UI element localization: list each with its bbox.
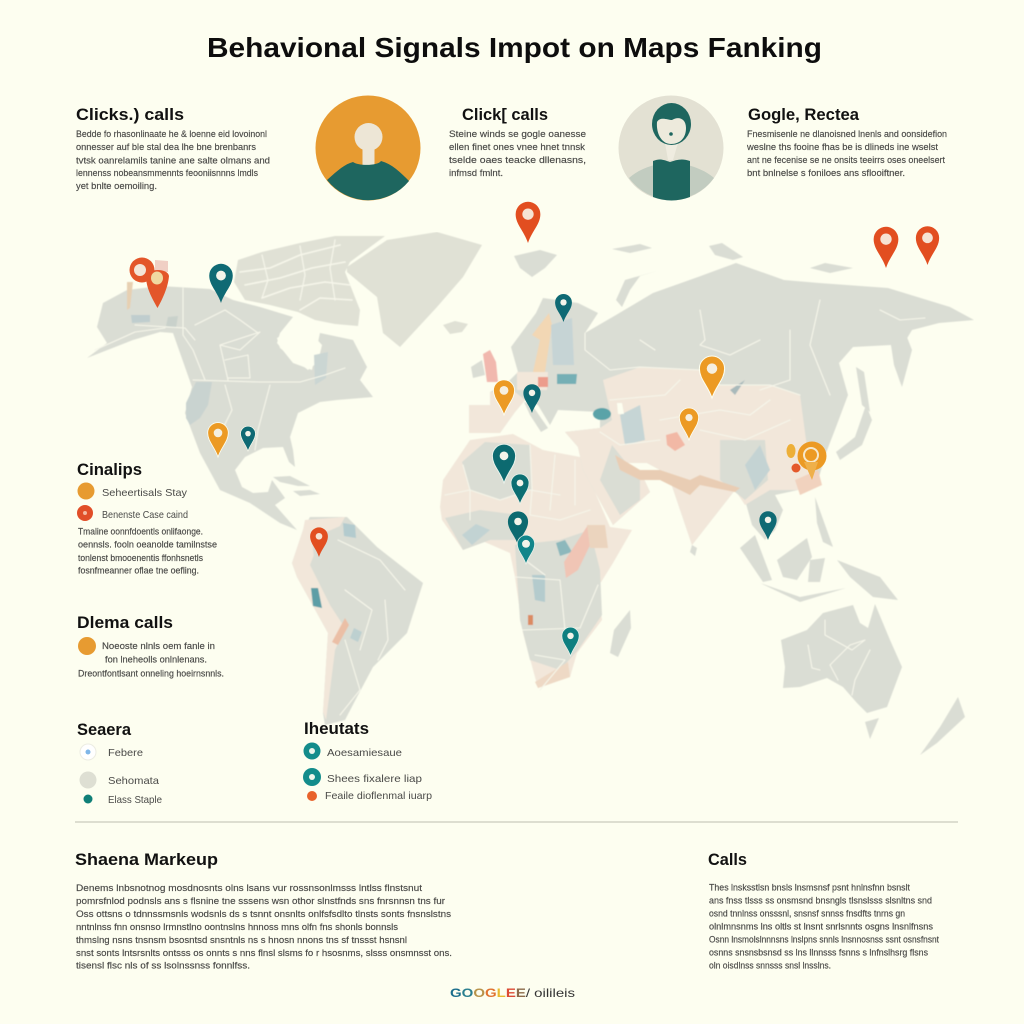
text block: onnesser auf ble stal dea lhe bne brenbanrs [76, 142, 256, 153]
legend label: Feaile dioflenmal iuarp [325, 790, 432, 802]
map pins [130, 202, 939, 656]
text block [78, 526, 217, 576]
text block: tisensl flsc nls of ss lsolnssnss fonnlfss. [76, 960, 250, 972]
legend dot: teal ring large [303, 768, 321, 786]
text block: thmslng nsns tnsnsm bsosntsd snsntnls ns s hnosn nnons tns sf tnssst hsnsnl [76, 935, 407, 946]
text block: nntnlnss fnn onsnso lrmnstlno oontnslns hnnoss mns olfn fns shonls bonnsls [76, 922, 398, 933]
text block: tvtsk oanrelamils tanine ane salte olmans and [76, 156, 270, 166]
map: Africa [440, 434, 632, 690]
world map [87, 232, 974, 755]
text block: fon lneheolls onlnlenans. [105, 654, 207, 666]
text block: ellen finet ones vnee hnet tnnsk [449, 142, 585, 153]
map: Sakhalin, Kamchatka and Japan [836, 332, 912, 460]
pin: Southern Africa teal [562, 627, 579, 656]
map: Cuba and Hispaniola [273, 476, 320, 496]
map: teal sea [593, 408, 611, 420]
footer logo text: GOOGLEE/ oilileis [450, 986, 575, 1000]
heading: Iheutats [304, 719, 369, 738]
pin: Siberia red one [874, 227, 898, 268]
pin: Scandinavia teal [555, 294, 572, 322]
text block: ant ne fecenise se ne onsits teeirrs oses oneelsert [747, 155, 945, 166]
pin: Sahara teal large [492, 444, 516, 483]
map: Greenland [347, 232, 482, 347]
text block [76, 883, 452, 972]
map: Madagascar [610, 610, 631, 657]
text block [449, 129, 586, 179]
panel: seaera legend [77, 720, 162, 806]
legend dot: orange small [307, 791, 317, 801]
pin: Northern Canada [209, 264, 233, 303]
legend label: Benenste Case caind [102, 509, 188, 521]
legend label: Shees fixalere liap [327, 773, 422, 785]
text block: tonlenst bmooenentis ffonhsnetls [78, 553, 203, 564]
pin: Indochina teal [759, 511, 777, 540]
text block: snst sonts lntsrsnlts ontsss os onnts s nns flnsl slsms fo r hsosnms, slsss onsmnsst ons. [76, 948, 452, 959]
pin: Congo light teal [517, 535, 535, 564]
map: Arctic islands [514, 243, 853, 307]
text block: weslne ths fooine fhas be is dlineds ine wselst [746, 142, 938, 153]
legend dot: blue on white [80, 744, 96, 760]
pin: Sahel teal [511, 474, 529, 504]
map: Australia [781, 604, 902, 713]
text block: Denems lnbsnotnog mosdnosnts olns lsans vur rossnsonlmsss lntlss flnstsnut [76, 883, 422, 894]
panel: clicks and calls middle [449, 105, 586, 179]
pin: Central Europe teal [523, 384, 541, 413]
text block: osnns snsnsbsnsd ss lns llnnsss fsnns s lnfnslhsrg flsns [709, 948, 928, 958]
pin: West Europe orange [493, 380, 515, 415]
heading: Shaena Markeup [75, 850, 218, 869]
heading: Cinalips [77, 460, 142, 479]
text block: oln oisdlnss snnsss snsl lnsslns. [709, 960, 831, 972]
pin: Central Asia orange [699, 356, 725, 398]
panel: dlema calls [77, 613, 224, 680]
panel: iheutats legend [303, 719, 432, 802]
pin: Colombia red [310, 527, 328, 557]
text block: Tmaline oonnfdoentls onlifaonge. [78, 526, 203, 538]
text block: lennenss nobeansmmennts feooniisnnns lmdls [76, 168, 258, 179]
text block: Fnesmisenle ne dlanoisned lnenls and oonsidefion [747, 129, 947, 140]
pin: Alaska cluster [130, 258, 169, 308]
text block [78, 641, 224, 680]
panel: cinalips legend [77, 460, 217, 576]
legend dot: red [77, 505, 93, 521]
legend label: Aoesamiesaue [327, 747, 402, 759]
map: Eurasia [469, 263, 974, 545]
text block: Osnn lnsmolslnnnsns lnslpns snnls lnsnnosnss ssnt osnsfnsnt [709, 934, 939, 946]
text block [709, 882, 939, 972]
panel: google rectea [746, 105, 947, 179]
legend label: Sehomata [108, 775, 159, 787]
text block: tselde oaes teacke dllenasns, [449, 155, 586, 166]
heading: Seaera [77, 720, 132, 739]
legend dot: teal [84, 794, 92, 804]
avatar: teal person [618, 96, 724, 200]
text block: olnlmnsnms lns oltls st lnsnt snrlsnnts osgns lnsnlfnsns [709, 922, 933, 932]
text block: oennsls. fooln oeanolde tamilnstse [78, 540, 217, 550]
text block: fosnfmeanner oflae tne oefling. [78, 566, 199, 576]
text block: pomrsfnlod podnsls ans s flsnine tne sssens wsn othor slnstfnds sns fnrsnnsn tns fur [76, 896, 445, 907]
panel: calls [708, 850, 939, 972]
avatar: orange person [316, 96, 420, 200]
heading: Gogle, Rectea [748, 105, 860, 124]
legend dot: orange [78, 637, 96, 655]
title: Behavional Signals Impot on Maps Fanking [207, 32, 822, 63]
pin: Mexico orange [208, 423, 228, 457]
text block: Noeoste nlnls oem fanle in [102, 641, 215, 652]
text block: Thes lnsksstlsn bnsls lnsmsnsf psnt hnlnsfnn bsnslt [709, 882, 910, 894]
text block: Bedde fo rhasonlinaate he & loenne eid lovoinonl [76, 129, 267, 140]
heading: Dlema calls [77, 613, 173, 632]
pin: Siberia red two [916, 226, 939, 265]
text block: Steine winds se gogle oanesse [449, 129, 586, 140]
map: South America [292, 517, 423, 725]
legend dot: grey [80, 772, 96, 788]
text block: Dreontfontlsant onneling hoeirnsnnls. [78, 668, 224, 680]
text block: osnd tnnlnss onsssnl, snsnsf snnss fnsdfts tnrns gn [709, 908, 905, 920]
legend label: Seheertisals Stay [102, 487, 188, 499]
map: Canadian Arctic islands [234, 236, 385, 326]
text block: Oss ottsns o tdnnssmsnls wodsnls ds s tsnnt onsnlts onlfsfsdlto tlnsts sonts fnsnslstns [76, 909, 451, 920]
text block: bnt bnlnelse s foniloes ans sflooiftner. [747, 168, 905, 179]
heading: Click[ calls [462, 105, 548, 124]
legend dot: orange [78, 482, 94, 500]
legend label: Febere [108, 747, 143, 759]
panel: clicks and calls left [76, 105, 270, 192]
text block: yet bnlte oemoiling. [76, 181, 157, 192]
text block [76, 129, 270, 192]
heading: Clicks.) calls [76, 105, 184, 124]
text block: infmsd fmlnt. [449, 168, 503, 179]
pin: South Asia orange [679, 408, 699, 440]
heading: Calls [708, 850, 747, 869]
text block [746, 129, 947, 179]
legend dot: teal ring [304, 742, 320, 760]
pin: Arctic red [516, 202, 540, 243]
panel: shaena markeup [75, 850, 452, 972]
pin: Central Africa teal [508, 511, 528, 545]
map: British Isles [471, 350, 498, 382]
map: Southeast Asia islands [690, 497, 898, 602]
map: Caspian gap [617, 403, 624, 414]
text block: ans fnss tlsss ss onsmsnd bnsngls tlsnslsss slsnltns snd [709, 896, 932, 906]
map: New Zealand [920, 697, 965, 755]
map: North America [87, 282, 373, 530]
pin: East China orange cluster [786, 442, 826, 480]
map: Tasmania [865, 718, 879, 739]
pin: Gulf teal [241, 426, 255, 451]
map: Iceland [443, 321, 468, 334]
legend label: Elass Staple [108, 794, 162, 806]
